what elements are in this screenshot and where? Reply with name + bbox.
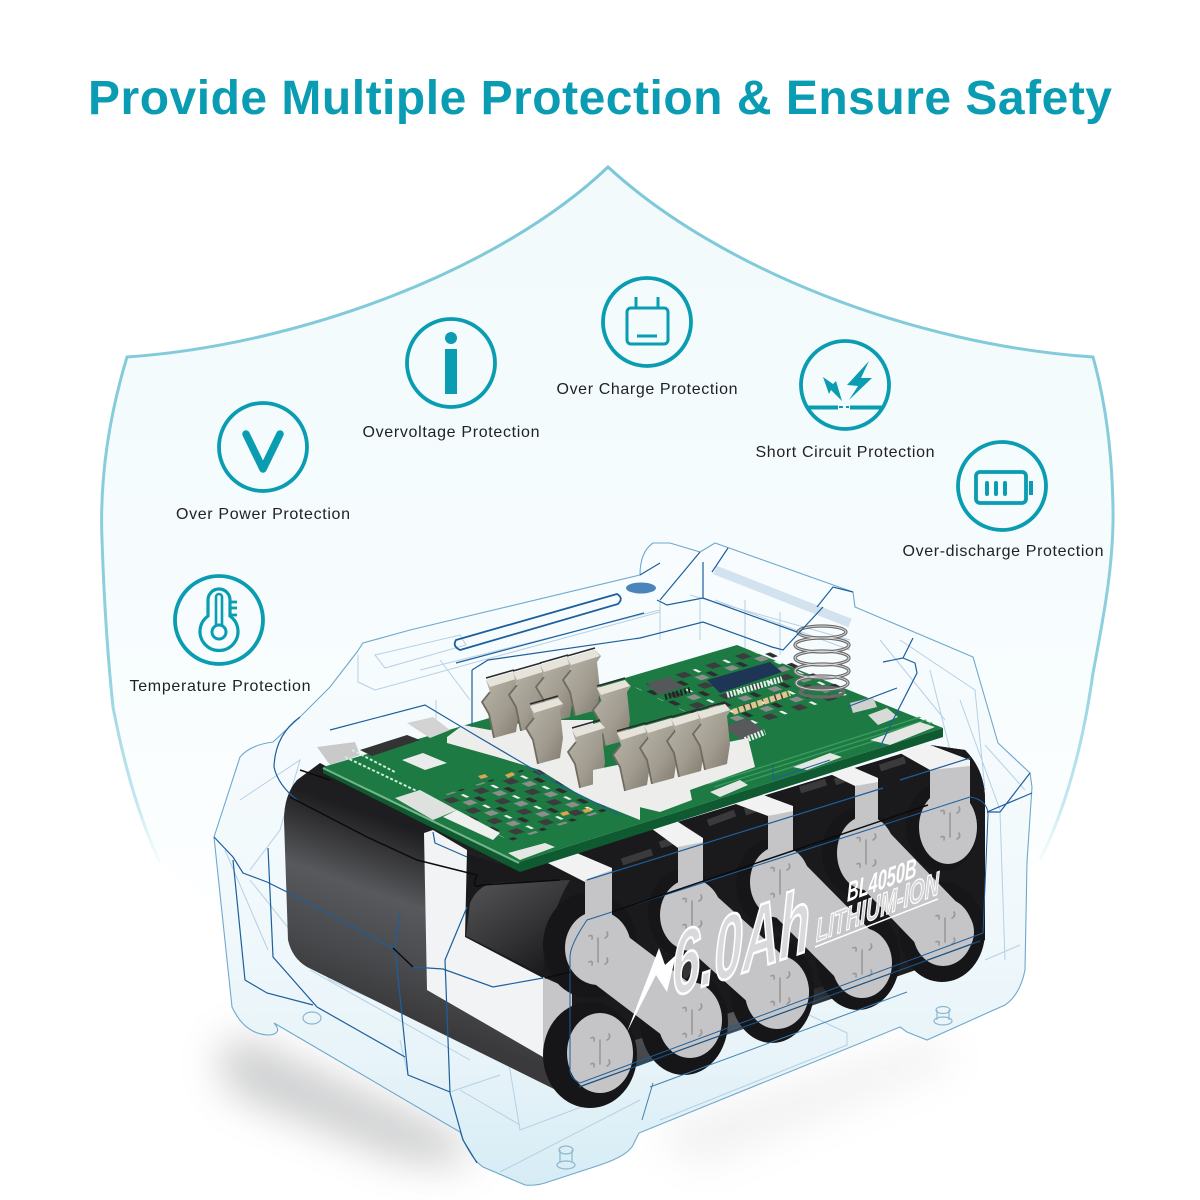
dark top section between tabs bbox=[465, 745, 985, 1050]
capacity text: 6.0Ah bbox=[672, 869, 810, 1016]
label: overvoltage: Overvoltage Protection bbox=[362, 424, 540, 441]
right chip field bbox=[635, 647, 856, 733]
white connector grid bbox=[395, 790, 457, 820]
white edge pad bbox=[508, 843, 555, 860]
transparent case body bbox=[214, 543, 1032, 1185]
label: short circuit: Short Circuit Protection bbox=[756, 444, 934, 461]
metal terminals front row bbox=[613, 702, 731, 791]
label: over-discharge: Over-discharge Protection bbox=[902, 543, 1104, 560]
label: over power: Over Power Protection bbox=[176, 506, 350, 523]
model text: BL4050B bbox=[847, 851, 917, 908]
white long pad bbox=[443, 810, 500, 840]
icon: over charge bbox=[603, 278, 691, 366]
disc embossing bbox=[589, 807, 960, 1067]
ribs between cells bbox=[622, 760, 905, 862]
spring bbox=[795, 626, 849, 697]
silver contact second bbox=[407, 717, 450, 738]
grey ic lower bbox=[723, 718, 765, 740]
rounded cell side bbox=[466, 880, 570, 975]
case pale inner lines bbox=[225, 595, 1025, 1172]
pcb components bbox=[368, 644, 933, 850]
metal terminals back row bbox=[482, 648, 601, 738]
chemistry underline bbox=[815, 899, 938, 947]
icon: overvoltage bbox=[407, 319, 495, 407]
silk print lines bbox=[345, 750, 440, 802]
ground shadow left bbox=[215, 1035, 470, 1165]
label: over charge: Over Charge Protection bbox=[556, 381, 738, 398]
pcb light rim bbox=[323, 768, 519, 863]
white pads right bbox=[710, 697, 935, 797]
board traces bbox=[707, 717, 933, 790]
case foreground lines bbox=[214, 548, 1032, 1163]
icon: short circuit bbox=[801, 341, 889, 429]
icon: temperature bbox=[175, 576, 263, 664]
navy ic with pins bbox=[707, 662, 782, 695]
pale band behind spring bbox=[715, 570, 850, 623]
nickel discs bbox=[565, 790, 977, 1093]
dark header strip bbox=[360, 735, 420, 756]
dark seam lines bbox=[290, 770, 928, 978]
chemistry text: LITHIUM-ION bbox=[816, 864, 940, 949]
battery illustration bbox=[214, 543, 1032, 1185]
metal terminals middle row bbox=[526, 678, 631, 788]
white insulation strip bbox=[424, 830, 543, 1057]
pcb edge bbox=[323, 728, 943, 872]
shield outline bbox=[102, 167, 1113, 863]
orange capacitors bbox=[478, 772, 592, 816]
cell black rims bbox=[543, 783, 985, 1108]
nickel strips bbox=[598, 852, 945, 1020]
shield fill bbox=[102, 167, 1113, 960]
label: temperature: Temperature Protection bbox=[130, 678, 310, 695]
battery left side bbox=[284, 745, 985, 1092]
lightning bolt bbox=[627, 948, 676, 1032]
icon: over-discharge bbox=[958, 442, 1046, 530]
icon: over power bbox=[219, 403, 307, 491]
feet bbox=[303, 1006, 952, 1169]
left chip field bbox=[427, 756, 651, 841]
white tab tops bbox=[538, 743, 970, 882]
ground shadow right bbox=[650, 1040, 960, 1165]
grey end panel bbox=[543, 977, 572, 1072]
grey ic left bbox=[647, 677, 690, 697]
nickel tabs bbox=[585, 766, 970, 920]
title: Provide Multiple Protection & Ensure Safety bbox=[88, 72, 1112, 125]
white square pad bbox=[402, 753, 447, 770]
six counter shadow bbox=[681, 960, 693, 980]
pcb board bbox=[323, 645, 943, 862]
tan capacitor row bbox=[733, 693, 790, 712]
connector housing front bbox=[593, 738, 755, 812]
connector housing back bbox=[447, 720, 640, 820]
blue vent badge bbox=[626, 582, 656, 594]
silver contact left bbox=[317, 742, 360, 765]
